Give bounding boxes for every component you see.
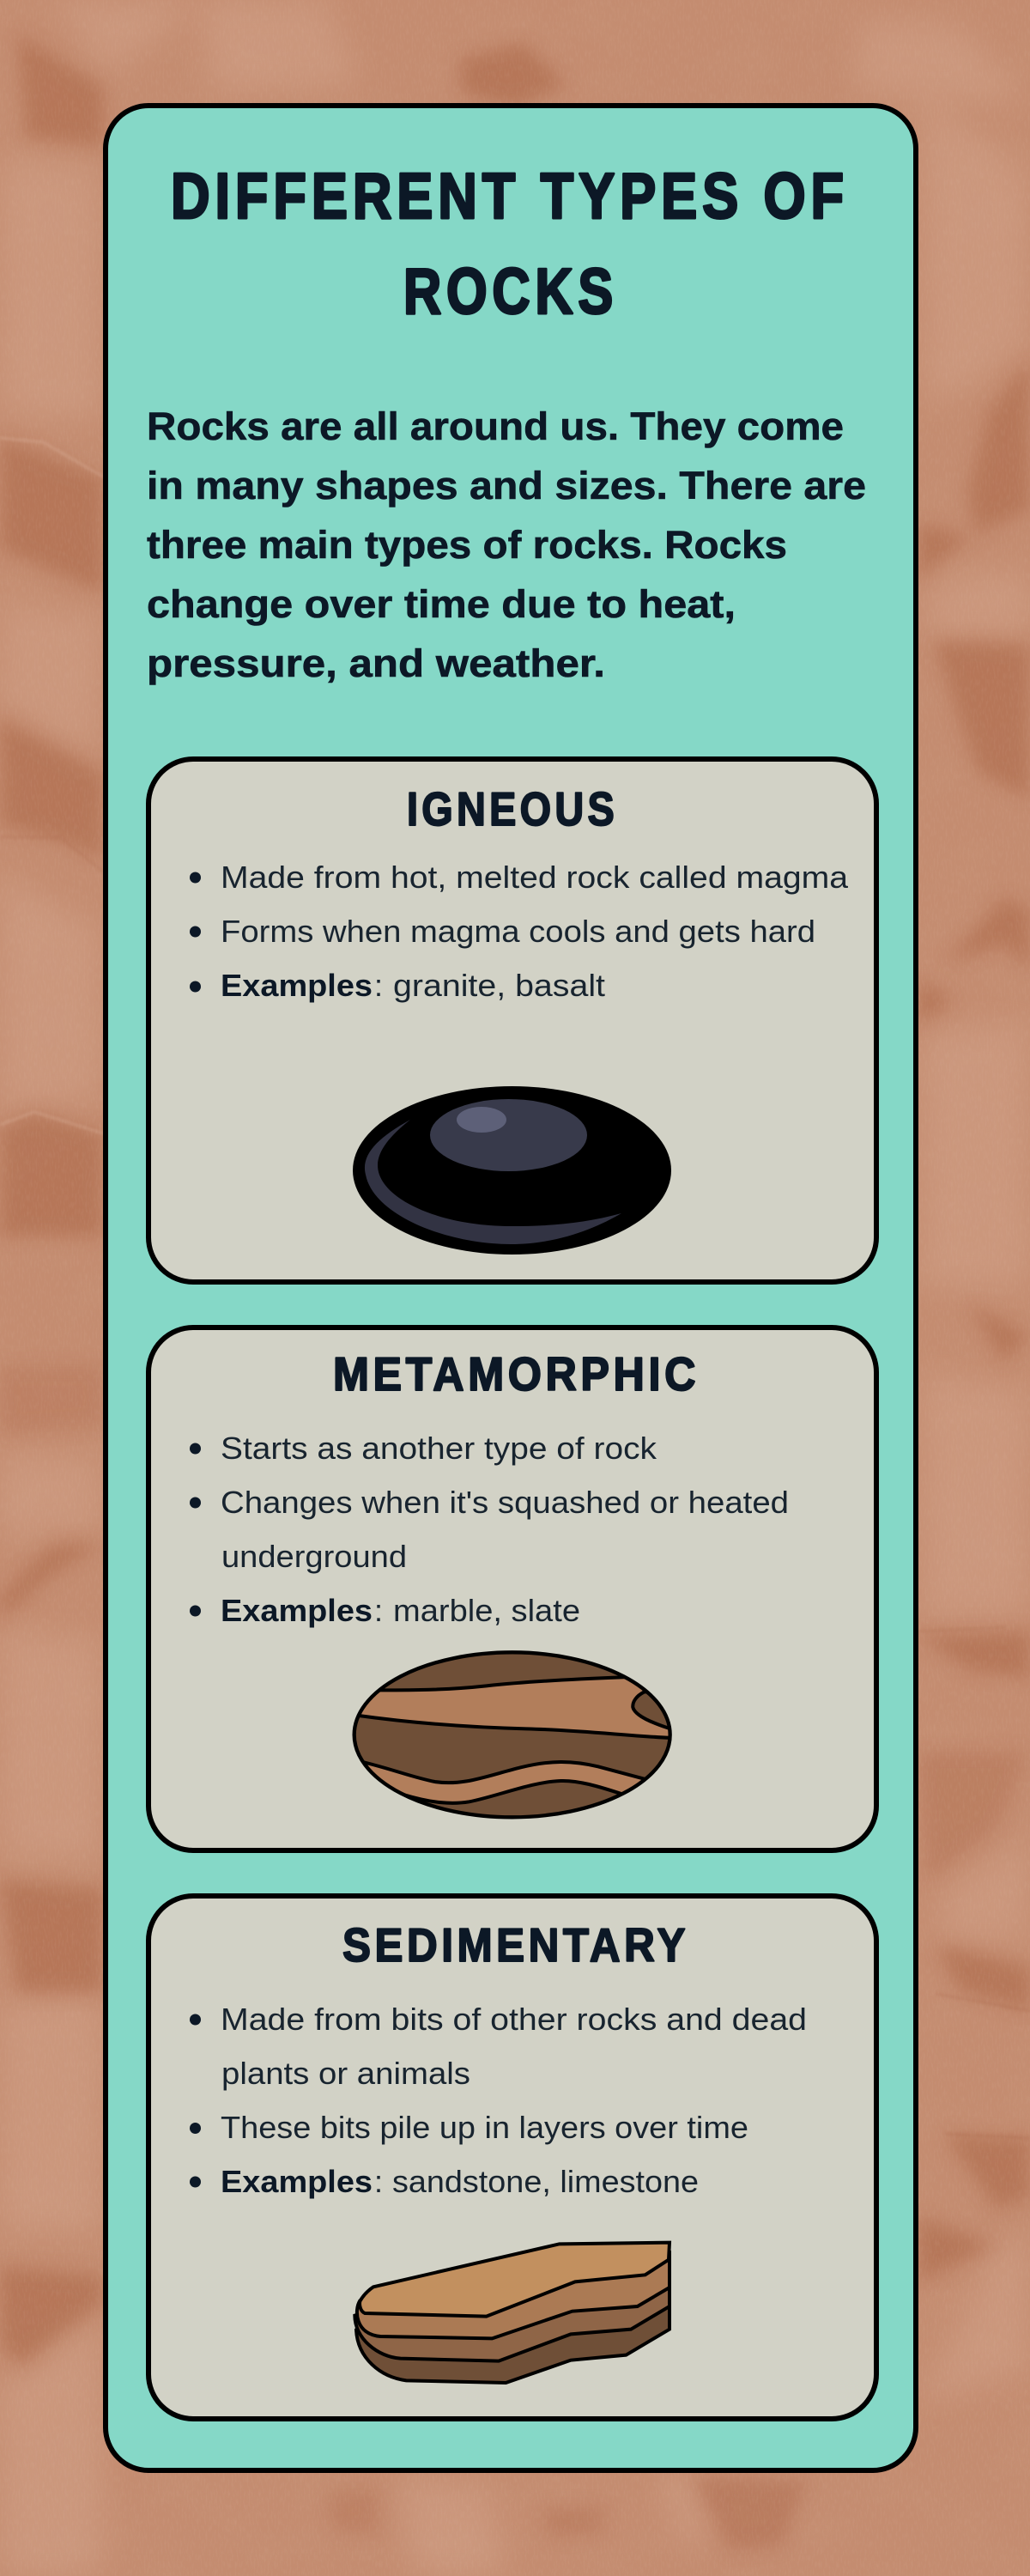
title [171,160,849,327]
bullet: igneous examples: : [374,968,383,1003]
bullet: sedimentary examples: : [374,2164,383,2199]
heading: sedimentary: SEDIMENTARY [342,1918,689,1971]
bullet: sedimentary examples: sandstone, limestone [392,2164,699,2199]
bullet: sedimentary examples: Examples [221,2164,373,2199]
bullet: layers over time: These bits pile up in layers over time [221,2110,748,2145]
bullet: made from bits: plants or animals [221,2056,470,2091]
heading: igneous: IGNEOUS [407,782,618,835]
icon: banded metamorphic rock [354,1652,698,1817]
intro text block: Rocks are all around us. They come [147,404,844,448]
bullet: igneous examples: granite, basalt [393,968,605,1003]
bullet: changes when squashed or heated [190,1485,789,1574]
bullet: forms when cooled: Forms when magma cools and gets hard [221,914,815,949]
panel: igneous [148,759,876,1282]
intro text block: change over time due to heat, [147,582,736,626]
bullet: starts as another rock: Starts as another type of rock [221,1431,657,1466]
bullet: metamorphic examples [190,1593,580,1628]
title: DIFFERENT TYPES OF [171,160,849,232]
intro text block: in many shapes and sizes. There are [147,464,866,507]
bullet: metamorphic examples: marble, slate [393,1593,580,1628]
icon: layered sedimentary rock [354,2243,670,2383]
heading: metamorphic: METAMORPHIC [333,1347,700,1400]
bullet: made from bits [190,2002,807,2091]
bullet: made from magma: Made from hot, melted rock called magma [221,860,849,895]
icon: black igneous rock [353,1086,671,1255]
panel: metamorphic [148,1327,876,1850]
bullet: made from bits: Made from bits of other rocks and dead [221,2002,807,2037]
main teal panel [106,106,916,2470]
title: ROCKS [403,255,618,327]
bullet: metamorphic examples: Examples [221,1593,373,1628]
panel: sedimentary [148,1896,876,2419]
intro text block [147,404,866,685]
bullet: igneous examples [190,968,605,1003]
bullet: changes when squashed or heated: Changes when it's squashed or heated [221,1485,789,1520]
intro text block: three main types of rocks. Rocks [147,523,787,567]
intro text block: pressure, and weather. [147,641,605,685]
bullet: metamorphic examples: : [374,1593,383,1628]
bullet: sedimentary examples [190,2164,699,2199]
bullet: igneous examples: Examples [221,968,373,1003]
bullet: changes when squashed or heated: underground [221,1539,407,1574]
